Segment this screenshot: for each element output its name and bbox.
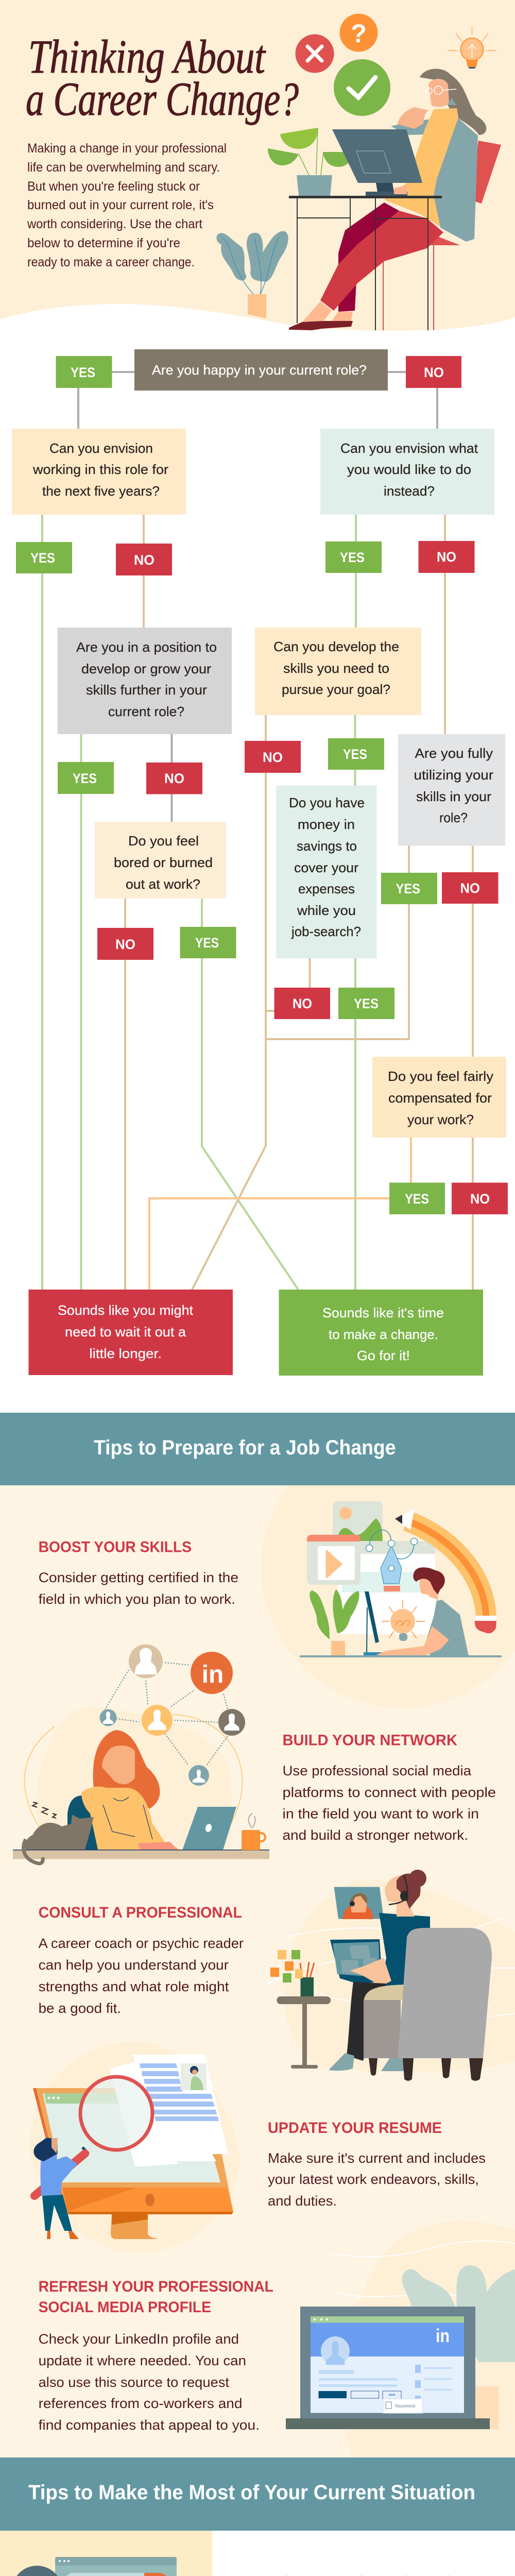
title: a Career Change? (26, 73, 299, 125)
question: fully utilizing: role? (439, 810, 468, 825)
question: envision instead (320, 429, 494, 515)
question: fully utilizing (398, 734, 505, 846)
banner: current situation (0, 2458, 515, 2531)
text: refresh profile: also use this source to request (39, 2375, 230, 2390)
result: change (279, 1290, 483, 1376)
intro text: ready to make a career change. (27, 255, 195, 269)
icon: question badge (340, 13, 378, 52)
no: NO (437, 549, 456, 565)
title (26, 30, 299, 125)
yes (389, 1183, 445, 1214)
question: bored: out at work? (126, 876, 200, 892)
text: refresh profile: references from co-workers and (39, 2396, 242, 2411)
result: wait: little longer. (90, 1346, 162, 1361)
yes: YES (73, 771, 97, 786)
question: five years: Can you envision (49, 440, 153, 456)
text: refresh profile: update it where needed. You can (39, 2353, 246, 2368)
text: consult a professional: can help you understand your (39, 1957, 229, 1973)
illustration: desk and computer (289, 129, 442, 330)
question: happy (134, 349, 388, 391)
text: refresh profile (39, 2278, 273, 2433)
no (442, 872, 499, 904)
no: NO (293, 996, 312, 1011)
question: savings: expenses (298, 881, 355, 896)
intro text: burned out in your current role, it's (27, 198, 214, 212)
question: develop skills: pursue your goal? (282, 682, 390, 697)
text: refresh profile: find companies that appeal to you. (39, 2417, 260, 2433)
banner: tips to prepare: Tips to Prepare for a Job Change (94, 1436, 396, 1459)
illustration: woman networking (13, 1645, 269, 1863)
question: bored: Do you feel (128, 833, 199, 849)
question: five years: the next five years? (42, 483, 160, 499)
question: savings: job-search? (291, 924, 361, 939)
illustration: woman networking: in (202, 1661, 224, 1688)
question: envision instead: Can you envision what (340, 440, 478, 456)
result: wait (29, 1290, 233, 1375)
question: compensated (372, 1057, 506, 1138)
question: fully utilizing: skills in your (416, 789, 491, 804)
question: five years: working in this role for (32, 462, 168, 477)
icon: question badge: ? (351, 19, 367, 48)
yes: YES (405, 1191, 429, 1207)
text: consult a professional: be a good fit. (39, 2001, 121, 2016)
question: savings: while you (297, 903, 356, 918)
intro text: worth considering. Use the chart (27, 217, 202, 231)
intro text: Making a change in your professional (27, 141, 227, 156)
text: consult a professional (39, 1904, 244, 2016)
text: build your network (282, 1732, 496, 1843)
title: Thinking About (28, 30, 266, 83)
question: envision instead: instead? (384, 483, 435, 499)
no: NO (164, 771, 184, 786)
question: develop skills (255, 628, 421, 715)
yes: YES (30, 550, 55, 566)
intro text (27, 141, 227, 269)
text: consult a professional: A career coach or psychic reader (39, 1936, 244, 1951)
intro text: life can be overwhelming and scary. (27, 160, 220, 175)
yes (56, 356, 112, 388)
yes (338, 988, 394, 1019)
text: boost your skills: field in which you plan to work. (39, 1591, 235, 1607)
flowchart (12, 349, 508, 1376)
text: build your network: Use professional social media (282, 1763, 472, 1778)
intro text: below to determine if you're (27, 236, 180, 250)
illustration: potted plant and monitor desk (268, 128, 501, 330)
question: develop skills: Can you develop the (273, 639, 399, 654)
question: savings: money in (298, 817, 355, 832)
banner: current situation: Tips to Make the Most of Your Current Situation (28, 2481, 475, 2504)
text: update your resume: UPDATE YOUR RESUME (268, 2120, 442, 2137)
question: happy: Are you happy in your current role? (152, 362, 367, 378)
yes: YES (71, 365, 95, 380)
result: change: Sounds like it's time (322, 1305, 444, 1320)
question: fully utilizing: Are you fully (415, 745, 493, 761)
text: build your network: BUILD YOUR NETWORK (282, 1732, 457, 1749)
no: NO (460, 880, 480, 896)
question: position to grow: develop or grow your (81, 661, 211, 676)
no: NO (263, 750, 283, 765)
no: NO (134, 552, 154, 568)
text: build your network: platforms to connect with people (282, 1785, 496, 1800)
no (418, 541, 475, 573)
yes: YES (396, 881, 420, 896)
icon: light bulb (448, 26, 496, 69)
question: bored (95, 822, 226, 899)
panel: develop additional skills (0, 2531, 472, 2576)
text: refresh profile: SOCIAL MEDIA PROFILE (39, 2299, 211, 2316)
illustration: linkedin laptop and plant (286, 2241, 515, 2429)
question: envision instead: you would like to do (347, 462, 471, 477)
text: update your resume: Make sure it's current and includes (268, 2150, 486, 2166)
illustration: background blob (342, 2221, 515, 2458)
text: update your resume: and duties. (268, 2193, 337, 2209)
banner: tips to prepare (0, 1413, 515, 1485)
text: boost your skills (39, 1538, 238, 1607)
no (245, 741, 301, 773)
no: NO (470, 1191, 490, 1207)
result: wait: Sounds like you might (58, 1302, 194, 1318)
text: refresh profile: REFRESH YOUR PROFESSIONAL (39, 2278, 273, 2295)
no: NO (115, 937, 135, 952)
icon: check badge (334, 59, 390, 116)
illustration: designer at computer (300, 1501, 502, 1657)
question: savings: Do you have (289, 795, 365, 810)
question: compensated: compensated for (388, 1090, 492, 1106)
intro text: But when you're feeling stuck or (27, 179, 200, 194)
no (146, 762, 202, 794)
yes: YES (340, 550, 365, 565)
yes: YES (343, 747, 367, 762)
yes (58, 762, 114, 794)
illustration: thinking woman (289, 69, 486, 330)
yes: YES (354, 996, 379, 1011)
question: savings: cover your (294, 860, 358, 875)
no (406, 356, 461, 388)
yes (328, 738, 384, 770)
yes (180, 927, 236, 958)
panel: prepare tips (0, 1485, 515, 2458)
panel: hero header (0, 0, 515, 331)
text: consult a professional: strengths and what role might (39, 1979, 229, 1994)
text: boost your skills: BOOST YOUR SKILLS (39, 1538, 192, 1556)
no (116, 544, 172, 575)
text: refresh profile: Check your LinkedIn profile and (39, 2331, 239, 2347)
yes (325, 541, 382, 573)
question: position to grow: skills further in your (86, 682, 207, 698)
no (274, 988, 330, 1019)
question: savings: savings to (297, 838, 357, 854)
question: position to grow (58, 628, 232, 734)
text: update your resume: your latest work endeavors, skills, (268, 2172, 479, 2187)
question: savings (276, 786, 377, 958)
result: wait: need to wait it out a (65, 1324, 186, 1340)
illustration: linkedin laptop and plant: Recommend (395, 2403, 415, 2409)
illustration: video consultation (268, 1870, 515, 2081)
yes (381, 873, 437, 904)
illustration: SEO browser (11, 2557, 177, 2576)
illustration: linkedin laptop and plant: in (436, 2325, 450, 2346)
yes: YES (195, 935, 219, 951)
result: change: to make a change. (329, 1327, 438, 1342)
icon: x badge (296, 34, 334, 73)
result: change: Go for it! (357, 1348, 410, 1363)
no (97, 928, 153, 960)
question: position to grow: Are you in a position to (76, 639, 217, 655)
text: build your network: in the field you want to work in (282, 1806, 479, 1822)
flow connectors (42, 372, 473, 1290)
text: build your network: and build a stronger network. (282, 1827, 468, 1843)
illustration: floor plant (216, 231, 288, 318)
question: bored: bored or burned (114, 855, 213, 870)
text: update your resume (268, 2120, 486, 2209)
no (452, 1183, 508, 1214)
illustration: linkedin laptop and plant: ••• (389, 2391, 395, 2398)
question: compensated: your work? (407, 1112, 474, 1127)
question: position to grow: current role? (108, 704, 184, 719)
question: five years (12, 429, 186, 515)
no: NO (424, 365, 444, 380)
text: boost your skills: Consider getting certified in the (39, 1570, 238, 1585)
question: fully utilizing: utilizing your (414, 767, 493, 783)
question: develop skills: skills you need to (283, 660, 389, 676)
illustration: resume under magnifier (29, 2042, 240, 2252)
question: compensated: Do you feel fairly (388, 1069, 493, 1084)
text: consult a professional: CONSULT A PROFESSIONAL (39, 1904, 242, 1921)
yes (16, 542, 72, 573)
